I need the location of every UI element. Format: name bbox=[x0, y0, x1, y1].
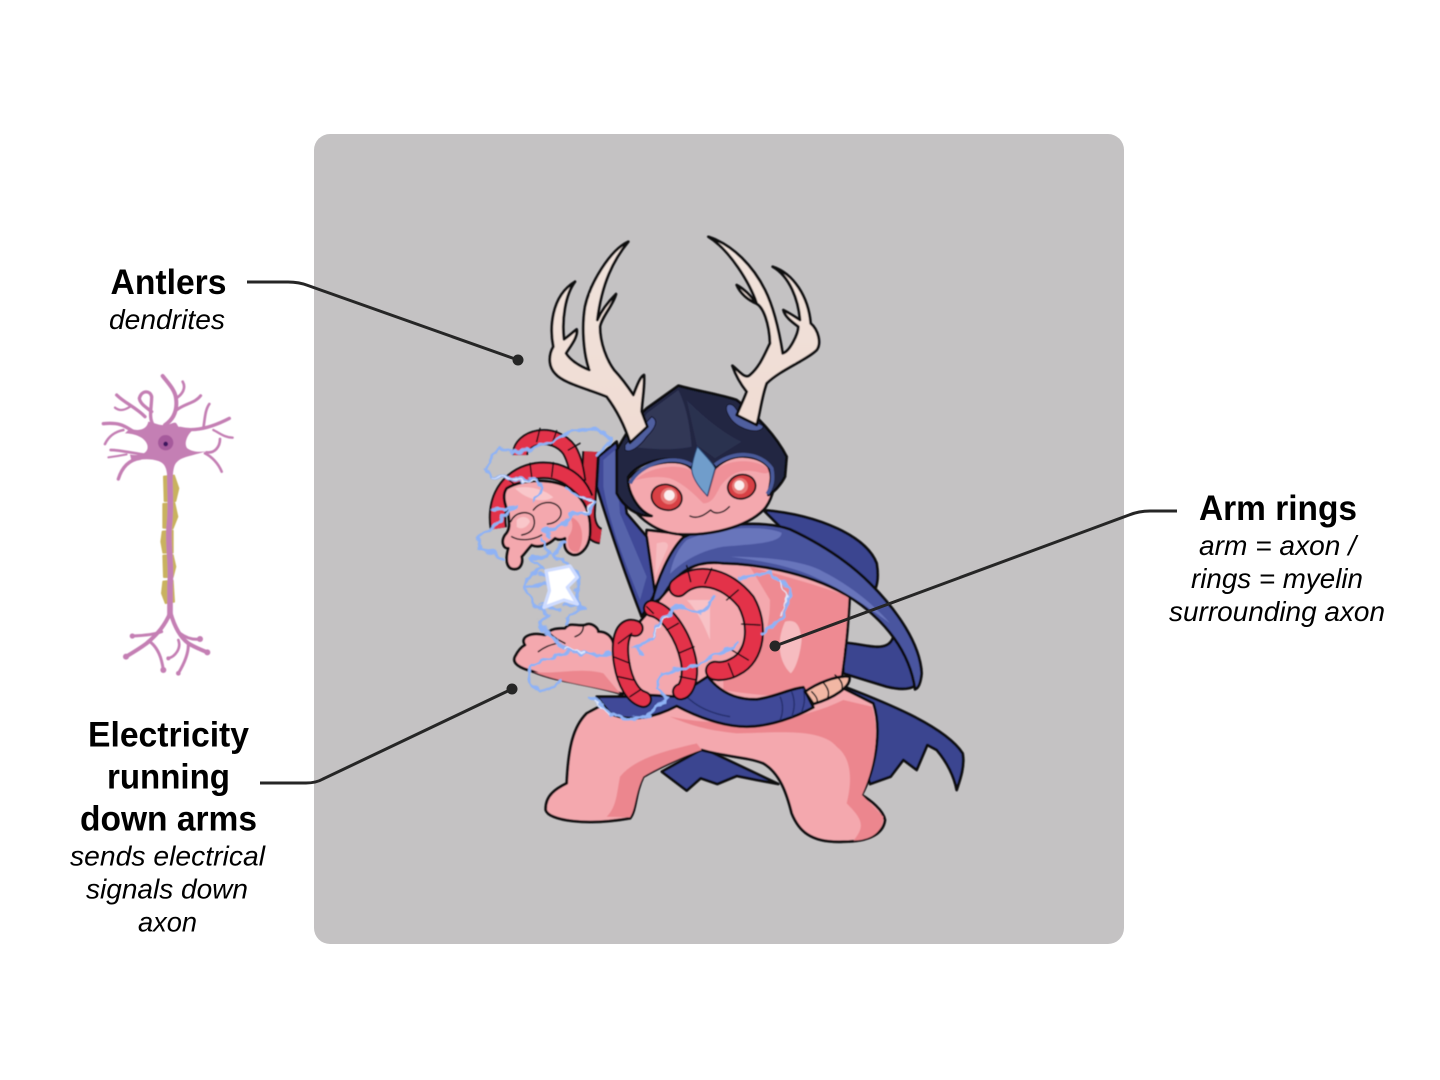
antler: right bbox=[708, 237, 819, 425]
cape: lower back drape bbox=[662, 685, 963, 791]
helmet rim bbox=[630, 455, 773, 494]
label: arm rings: surrounding axon bbox=[1169, 596, 1385, 627]
smile bbox=[690, 507, 729, 517]
label: electricity: running bbox=[107, 758, 230, 797]
label: electricity: down arms bbox=[80, 800, 257, 839]
label: electricity bbox=[70, 716, 266, 938]
palm bbox=[503, 481, 590, 569]
electricity arcs bbox=[478, 428, 791, 717]
axon terminals bbox=[123, 613, 210, 676]
connector: electricity bbox=[260, 684, 518, 783]
label: arm rings: arm = axon / bbox=[1199, 530, 1359, 561]
arm: axon arm bbox=[514, 582, 747, 697]
face bbox=[623, 456, 775, 534]
label: electricity: signals down bbox=[86, 874, 248, 905]
label: electricity: axon bbox=[138, 907, 197, 938]
big ring bbox=[678, 566, 760, 676]
helmet shell bbox=[617, 386, 787, 516]
small ring bbox=[613, 628, 643, 699]
coil across wrist bbox=[498, 470, 585, 528]
connector: antlers bbox=[247, 282, 524, 366]
eye right bbox=[725, 471, 758, 502]
eye left bbox=[649, 481, 685, 514]
helmet and face bbox=[617, 386, 787, 534]
cape: band draped at waist bbox=[597, 670, 850, 727]
label: electricity: Electricity bbox=[88, 716, 250, 755]
curled fingers bbox=[511, 502, 561, 540]
panel: grey character background bbox=[314, 134, 1124, 944]
body: torso and legs bbox=[546, 530, 885, 842]
label: arm rings: Arm rings bbox=[1199, 489, 1357, 528]
middle ring bbox=[647, 607, 697, 692]
tail stub bbox=[805, 676, 850, 704]
myelin sheath bbox=[161, 476, 178, 603]
arm rings: myelin bbox=[613, 566, 760, 699]
soma bbox=[125, 422, 207, 477]
cape: front dark strip and chest wrap bbox=[597, 442, 922, 689]
spark core bbox=[544, 566, 577, 607]
illustration: neuron creature character bbox=[478, 237, 963, 842]
antler sockets bbox=[625, 417, 656, 451]
upper hand with coiled rings bbox=[498, 428, 601, 569]
connector: arm rings bbox=[770, 511, 1177, 652]
cape: upper back drape bbox=[763, 510, 922, 689]
label: electricity: sends electrical bbox=[70, 841, 266, 872]
body shading bbox=[670, 700, 883, 841]
label: arm rings bbox=[1169, 489, 1385, 627]
axon bbox=[169, 468, 171, 615]
label: arm rings: rings = myelin bbox=[1191, 563, 1363, 594]
forehead gem bbox=[692, 447, 715, 496]
nucleus bbox=[158, 435, 173, 450]
label: antlers bbox=[109, 263, 226, 335]
coil side bbox=[587, 452, 601, 536]
dendrites bbox=[103, 376, 233, 479]
coil top bbox=[520, 437, 578, 482]
icon: neuron diagram bbox=[103, 376, 233, 676]
label: antlers: Antlers bbox=[110, 263, 226, 302]
label: antlers: dendrites bbox=[109, 304, 225, 335]
antler: left bbox=[550, 242, 647, 443]
